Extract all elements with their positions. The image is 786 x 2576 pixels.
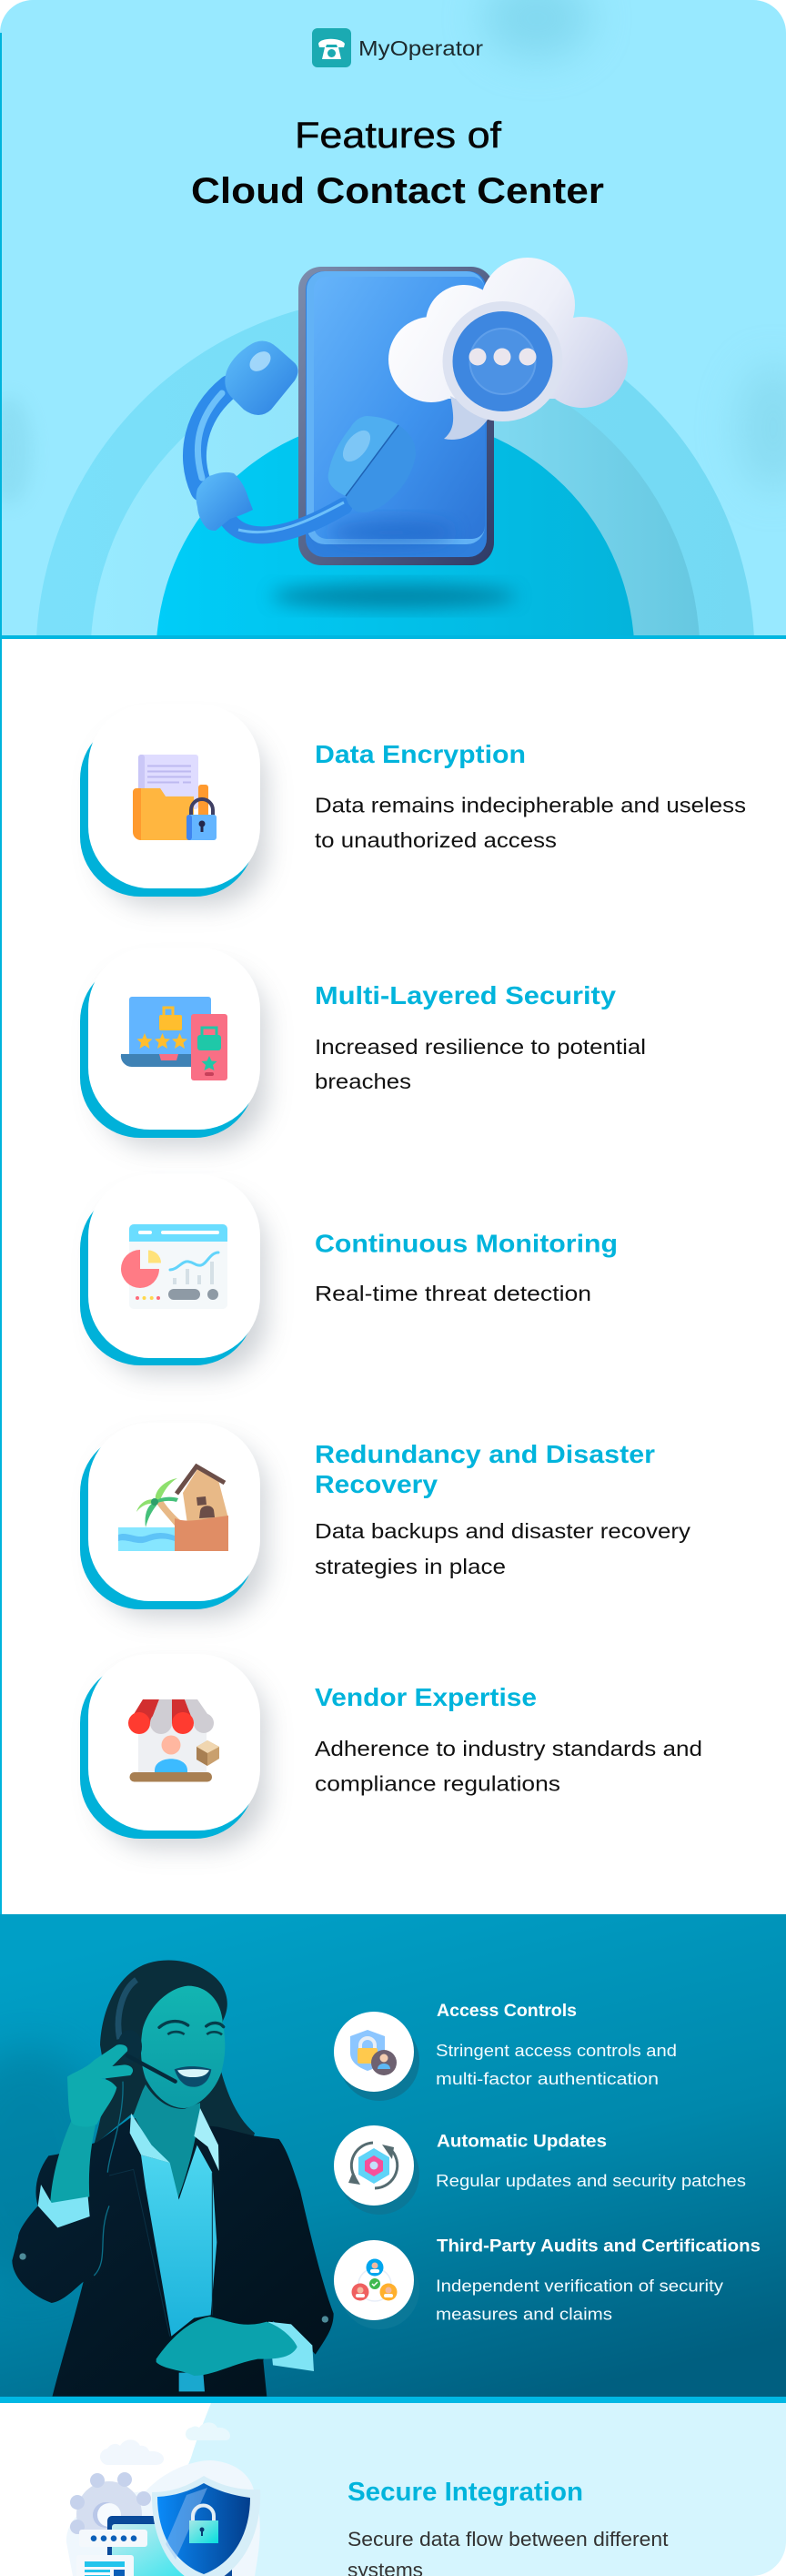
- tablet: [107, 2516, 232, 2576]
- heading: Access Controls: [437, 2002, 577, 2021]
- icon: folder with padlock: [133, 755, 217, 840]
- icon badge: shield lock user: [334, 2012, 419, 2101]
- shield: [152, 2476, 260, 2576]
- icon card: [80, 1654, 267, 1848]
- description: Real-time threat detection: [315, 1282, 591, 1305]
- icon card: [80, 1174, 267, 1374]
- illustration: gear, tablet and shield: [70, 2472, 260, 2576]
- feature: Data Encryption: [80, 704, 746, 906]
- logo wordmark: MyOperator: [358, 36, 483, 60]
- large ear cup: [346, 425, 416, 512]
- chat dots: [469, 348, 537, 366]
- phone: [298, 267, 494, 565]
- item: Third-Party Audits and Certifications: [334, 2237, 761, 2329]
- description: Increased resilience to potential: [315, 1035, 646, 1059]
- feature: Vendor Expertise: [80, 1654, 702, 1848]
- background arcs: [36, 309, 754, 635]
- description: Regular updates and security patches: [436, 2171, 746, 2190]
- heading: Redundancy and Disaster: [315, 1440, 655, 1468]
- icon card: [80, 704, 267, 906]
- item: Automatic Updates: [334, 2125, 746, 2215]
- description: [436, 2276, 724, 2324]
- item: Access Controls: [334, 2002, 677, 2101]
- icon badge: refresh hexagon: [334, 2125, 419, 2215]
- description: Data remains indecipherable and useless: [315, 794, 746, 817]
- cloud: [388, 258, 628, 408]
- icon: laptop with locks: [121, 997, 227, 1080]
- description: [348, 2528, 668, 2576]
- description: compliance regulations: [315, 1771, 560, 1795]
- heading: Secure Integration: [348, 2478, 583, 2507]
- description: Data backups and disaster recovery: [315, 1519, 691, 1543]
- heading: Multi-Layered Security: [315, 981, 616, 1009]
- heading: Continuous Monitoring: [315, 1229, 618, 1258]
- shield padlock: [189, 2505, 218, 2543]
- description: to unauthorized access: [315, 828, 557, 852]
- title: Cloud Contact Center: [191, 171, 604, 211]
- panel: hero header: [0, 0, 786, 639]
- description: breaches: [315, 1070, 411, 1093]
- panel: security features on teal: [0, 1914, 786, 2403]
- description: measures and claims: [436, 2305, 612, 2324]
- icon: storefront with vendor: [128, 1699, 219, 1782]
- headset: [195, 340, 416, 535]
- decorative left border: [0, 33, 2, 2542]
- gear: [70, 2472, 151, 2534]
- password field: [79, 2530, 147, 2547]
- description: Adherence to industry standards and: [315, 1737, 702, 1760]
- title: Features of: [295, 116, 502, 156]
- icon card: [80, 1423, 267, 1618]
- logo icon: [312, 28, 351, 67]
- description: [315, 794, 746, 852]
- description: Independent verification of security: [436, 2276, 724, 2296]
- icon: analytics dashboard: [121, 1224, 227, 1309]
- heading: Data Encryption: [315, 740, 526, 768]
- logo: [312, 28, 483, 67]
- heading: Third-Party Audits and Certifications: [437, 2237, 761, 2257]
- backdrop blob: [66, 2460, 260, 2576]
- icon badge: connected people: [334, 2240, 419, 2329]
- icon card: [80, 948, 267, 1147]
- photo: support agent with headset: [12, 1961, 334, 2397]
- panel: secure integration: [0, 2403, 786, 2576]
- heading: Recovery: [315, 1470, 438, 1498]
- heading: Automatic Updates: [437, 2132, 607, 2152]
- title: [191, 116, 604, 211]
- description: multi-factor authentication: [436, 2069, 659, 2088]
- illustration: phone with headset and cloud chat: [195, 258, 628, 608]
- panel: feature list: [80, 704, 746, 1848]
- top ear cup: [225, 340, 298, 415]
- description: Stringent access controls and: [436, 2041, 677, 2060]
- description: [436, 2041, 677, 2088]
- feature: Continuous Monitoring: [80, 1174, 618, 1374]
- description: Secure data flow between different: [348, 2528, 668, 2551]
- icon: storm-hit house and palm: [118, 1466, 228, 1551]
- mic bulge: [196, 472, 253, 531]
- feature: Redundancy and Disaster Recovery: [80, 1423, 691, 1618]
- feature: Multi-Layered Security: [80, 948, 646, 1147]
- description: [315, 1519, 691, 1578]
- chat bubble: [442, 301, 562, 440]
- description: [315, 1737, 702, 1795]
- description: strategies in place: [315, 1555, 506, 1578]
- heading: [315, 1440, 655, 1498]
- description: [315, 1035, 646, 1093]
- document card: [85, 2555, 134, 2576]
- heading: Vendor Expertise: [315, 1683, 537, 1711]
- clouds: [100, 2422, 230, 2465]
